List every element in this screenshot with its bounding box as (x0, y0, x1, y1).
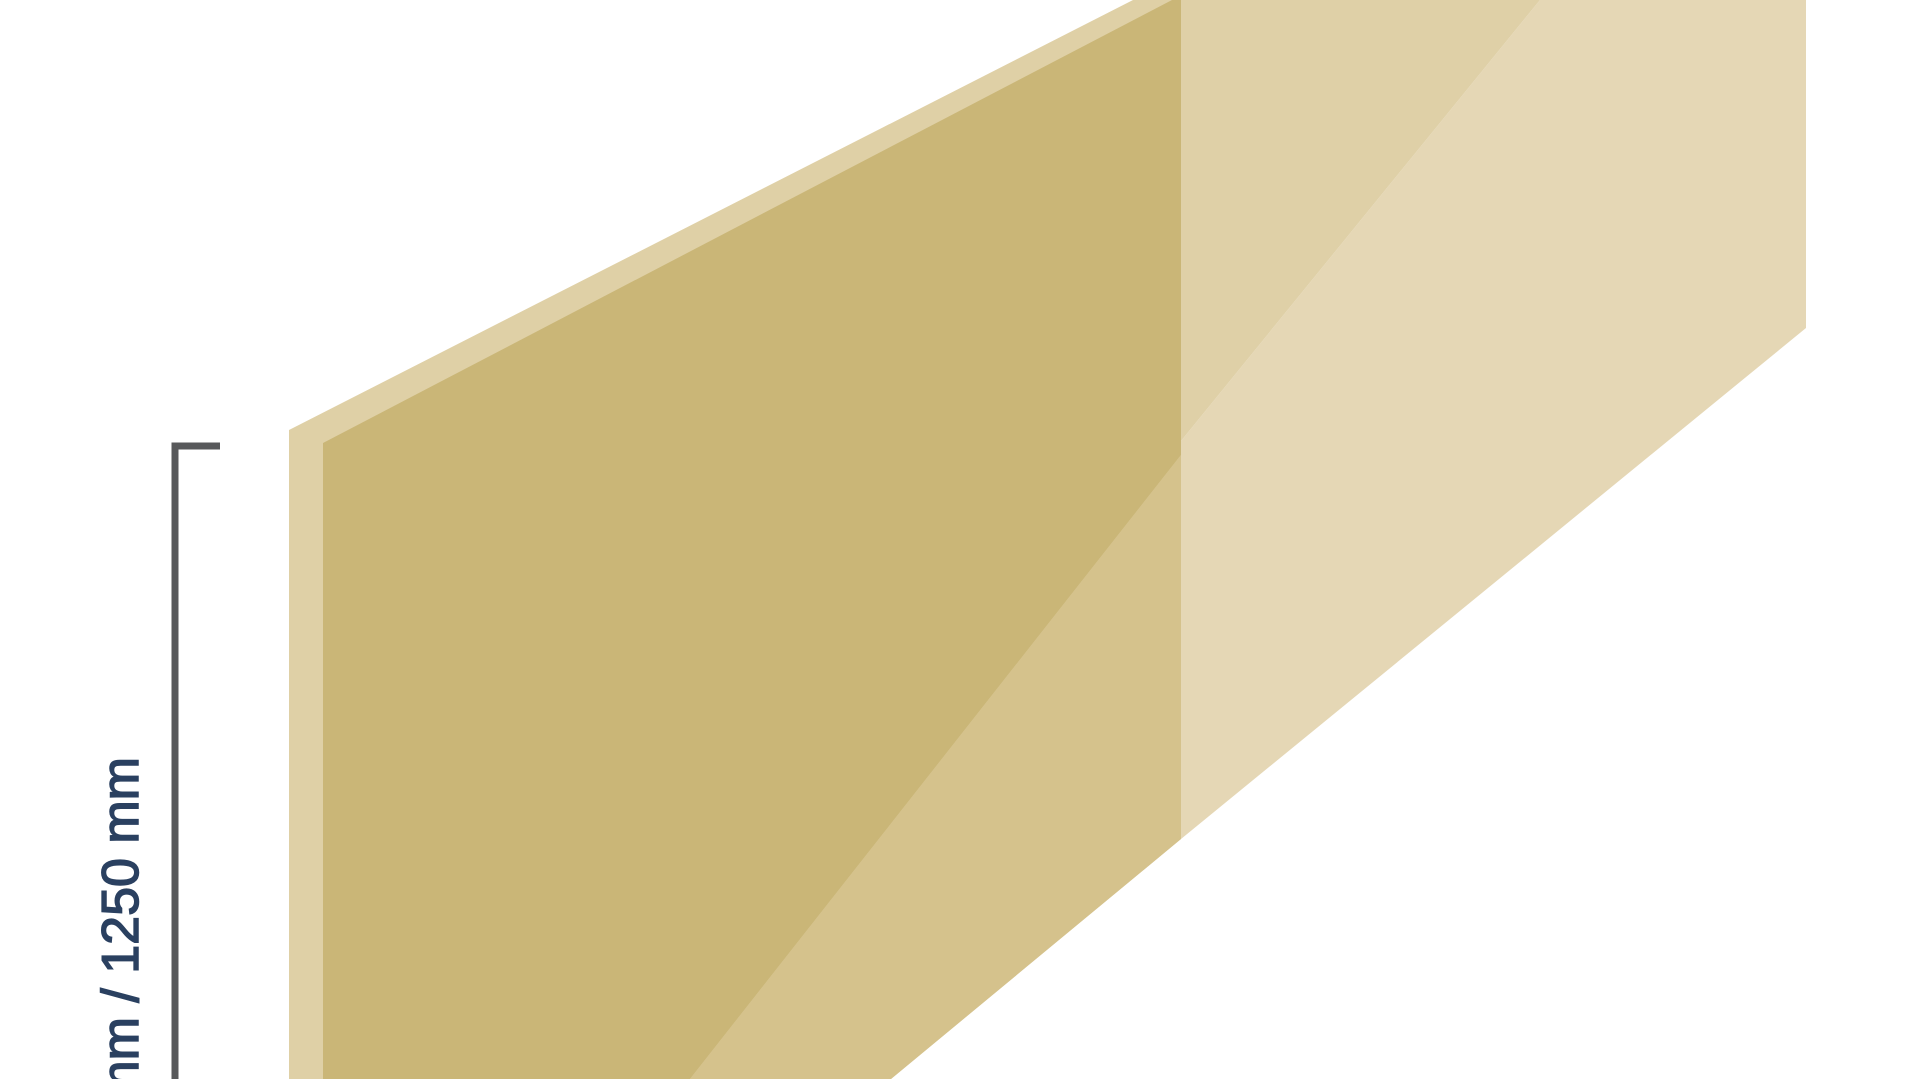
board front face (323, 0, 1181, 1079)
front face highlight (690, 455, 1181, 1079)
right face upper shade (1181, 0, 1540, 441)
dimension bracket (175, 446, 220, 1079)
board edge strip (289, 0, 1181, 1079)
right face light area (1181, 0, 1806, 839)
board: left front face (289, 0, 1181, 1079)
board: right reflected face (1181, 0, 1806, 839)
